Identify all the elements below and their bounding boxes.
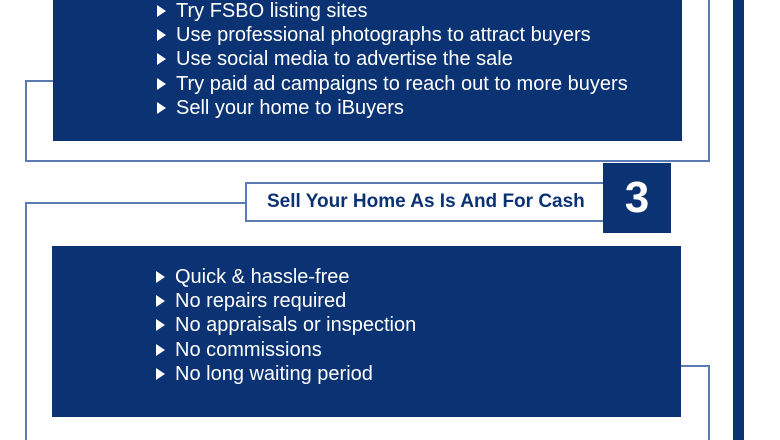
panel: section 3 benefits (52, 246, 681, 417)
panel: section 2 tips: Try FSBO listing sites (176, 0, 368, 22)
panel: section 3 benefits: No commissions (175, 339, 322, 361)
heading: section 3 (245, 182, 605, 222)
panel: section 3 benefits: No appraisals or inspection (175, 314, 416, 336)
number badge 3 (603, 163, 671, 233)
panel: section 2 tips: Sell your home to iBuyers (176, 97, 404, 119)
number badge 3: 3 (625, 173, 649, 222)
right vertical bar (733, 0, 744, 440)
panel: section 2 tips (53, 0, 682, 141)
panel: section 2 tips: Use professional photographs to attract buyers (176, 24, 591, 46)
heading: section 3: Sell Your Home As Is And For Cash (267, 191, 585, 212)
panel: section 2 tips: Use social media to advertise the sale (176, 48, 513, 70)
panel: section 3 benefits: No long waiting period (175, 363, 373, 385)
panel: section 3 benefits: Quick & hassle-free (175, 266, 350, 288)
panel: section 2 tips: Try paid ad campaigns to reach out to more buyers (176, 73, 628, 95)
panel: section 3 benefits: No repairs required (175, 290, 346, 312)
